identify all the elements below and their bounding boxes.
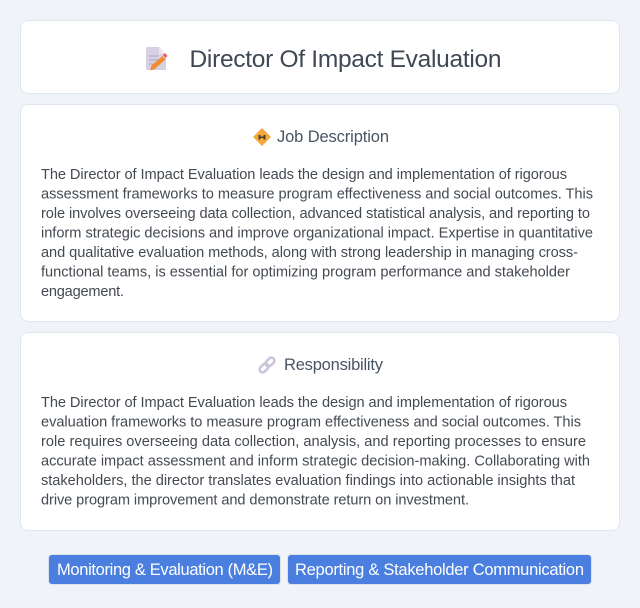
text block: responsibility: role requires overseeing data collection, analysis, and reporting processes to ensure [41, 434, 586, 450]
text block: job description: assessment frameworks to measure program effectiveness and social outcomes. This [41, 186, 593, 202]
heading: responsibility: Responsibility [284, 356, 384, 374]
text block: responsibility: accurate impact assessment and inform strategic decision-making. Collaborating with [41, 454, 590, 470]
text block: job description: The Director of Impact Evaluation leads the design and implementation of rigorous [41, 167, 567, 183]
text block: responsibility: stakeholders, the director translates evaluation findings into actionable insights that [41, 473, 575, 489]
panel: title card [20, 20, 620, 94]
text block: job description: inform strategic decisions and improve organizational impact. Expertise in quantitative [41, 226, 593, 242]
panel: responsibility card [20, 332, 620, 531]
text block: job description [41, 167, 593, 300]
heading: job description: Job Description [277, 128, 389, 146]
icon: road sign diamond [254, 129, 270, 145]
text block: job description: functional teams, is essential for optimizing program performance and stakeholder [41, 264, 570, 280]
text block: responsibility: drive program improvement and demonstrate return on investment. [41, 492, 469, 508]
panel: job description card [20, 104, 620, 322]
text block: responsibility: The Director of Impact Evaluation leads the design and implementation of rigorous [41, 395, 567, 411]
icon: document with pencil [146, 47, 168, 70]
text block: responsibility [41, 395, 590, 508]
text block: job description: engagement. [41, 284, 124, 300]
text block: job description: role involves overseeing data collection, advanced statistical analysis, and reporting to [41, 206, 590, 222]
tag: monitoring and evaluation background [49, 555, 280, 584]
text block: job description: and qualitative evaluation methods, along with strong leadership in managing cross- [41, 245, 578, 261]
tag label: monitoring and evaluation: Monitoring & Evaluation (M&E) [57, 561, 273, 579]
tag: reporting and stakeholder communication background [288, 555, 591, 584]
tag label: reporting and stakeholder communication: Reporting & Stakeholder Communication [295, 561, 584, 579]
title: Director Of Impact Evaluation [190, 46, 502, 73]
icon: chain link [258, 356, 276, 374]
text block: responsibility: evaluation frameworks to measure program effectiveness and social outcomes. This [41, 414, 581, 430]
